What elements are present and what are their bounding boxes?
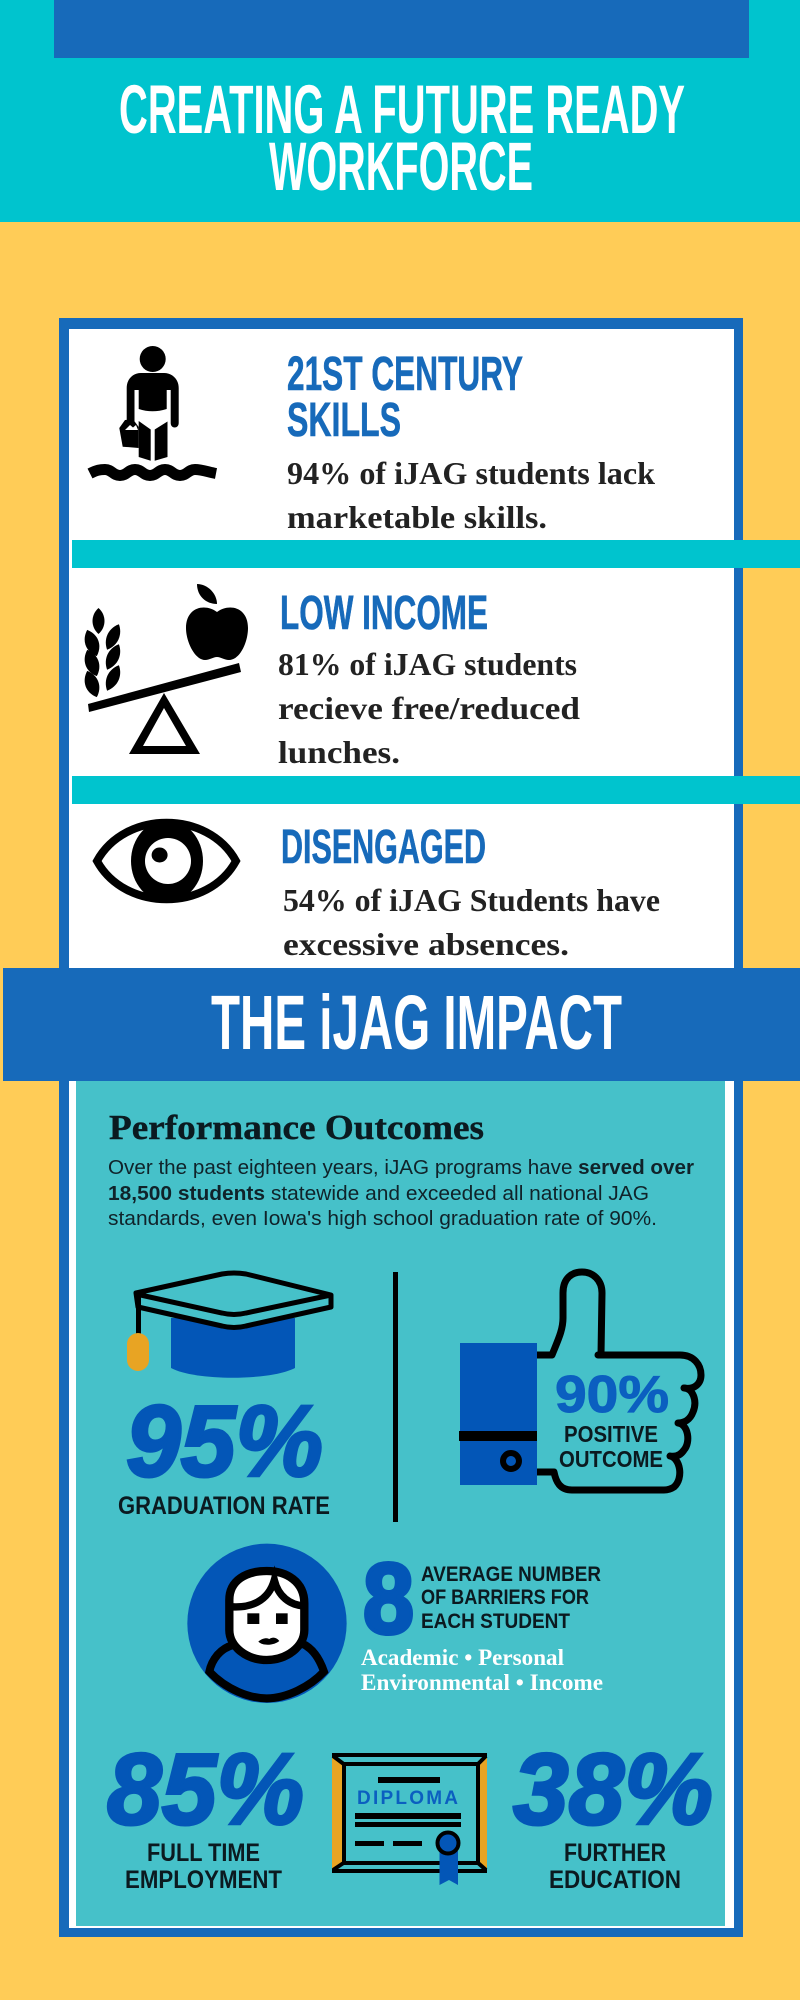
text: skills statistic xyxy=(287,455,655,535)
text: income statistic xyxy=(278,646,580,770)
text: absence statistic: excessive absences. xyxy=(283,926,569,962)
stat: 8 average barriers: Academic • Personal xyxy=(361,1645,564,1670)
text: intro paragraph: standards, even Iowa's high school graduation rate of 90%. xyxy=(108,1208,657,1230)
text: intro paragraph: Over the past eighteen years, iJAG programs have served over xyxy=(108,1157,694,1179)
stat: 38% further education: 38% xyxy=(513,1734,713,1846)
heading: performance outcomes: Performance Outcomes xyxy=(109,1108,484,1147)
vertical divider xyxy=(393,1272,398,1522)
divider bar: cyan 1 xyxy=(72,540,800,568)
stat: 8 average barriers: AVERAGE NUMBER xyxy=(421,1563,601,1586)
stat: 95% graduation rate: 95% xyxy=(126,1386,323,1498)
header panel xyxy=(0,0,800,222)
stat: 85% full time employment: EMPLOYMENT xyxy=(125,1866,282,1894)
stat: 95% graduation rate: GRADUATION RATE xyxy=(118,1492,330,1520)
stat: 8 average barriers: 8 xyxy=(363,1543,414,1655)
heading: 21st century skills: SKILLS xyxy=(287,394,401,447)
icon: thumbs up with 90% positive outcome xyxy=(459,1272,701,1490)
stat: 8 average barriers: EACH STUDENT xyxy=(421,1610,570,1633)
text: absence statistic xyxy=(283,882,660,962)
text: income statistic: lunches. xyxy=(278,734,400,770)
text: income statistic: recieve free/reduced xyxy=(278,690,580,726)
icon: diploma: DIPLOMA xyxy=(357,1788,458,1809)
stat: 8 average barriers: Environmental • Income xyxy=(361,1670,603,1695)
text: income statistic: 81% of iJAG students xyxy=(278,646,577,682)
icon: student portrait xyxy=(187,1544,347,1703)
text: skills statistic: marketable skills. xyxy=(287,499,547,535)
panel: challenges xyxy=(59,318,800,979)
icon: person in water with bucket xyxy=(90,346,216,476)
icon: eye xyxy=(97,820,236,902)
stat: 38% further education: EDUCATION xyxy=(549,1866,681,1894)
stat: 85% full time employment xyxy=(107,1734,304,1894)
stat: 85% full time employment: FULL TIME xyxy=(147,1839,260,1867)
text: skills statistic: 94% of iJAG students lack xyxy=(287,455,655,491)
icon: wheat and apple on scale xyxy=(81,584,248,754)
panel: performance outcomes xyxy=(59,1070,743,1937)
heading: low income: LOW INCOME xyxy=(280,587,488,640)
text: intro paragraph xyxy=(108,1157,694,1230)
icon: graduation cap xyxy=(127,1273,331,1378)
stat: 85% full time employment: 85% xyxy=(107,1734,304,1846)
heading: disengaged: DISENGAGED xyxy=(281,821,486,874)
title xyxy=(119,71,685,205)
stat: 8 average barriers: OF BARRIERS FOR xyxy=(421,1586,589,1609)
icon: thumbs up with 90% positive outcome: 90% xyxy=(555,1366,669,1424)
icon: diploma xyxy=(332,1755,487,1885)
heading: 21st century skills xyxy=(287,348,523,447)
banner: the iJAG impact xyxy=(3,968,800,1081)
divider bar: cyan 2 xyxy=(72,776,800,804)
title: WORKFORCE xyxy=(269,128,533,205)
stat: 8 average barriers xyxy=(361,1543,603,1695)
heading: 21st century skills: 21ST CENTURY xyxy=(287,348,523,401)
text: intro paragraph: 18,500 students statewide and exceeded all national JAG xyxy=(108,1183,649,1205)
text: absence statistic: 54% of iJAG Students have xyxy=(283,882,660,918)
icon: thumbs up with 90% positive outcome: POSITIVE xyxy=(564,1421,658,1447)
stat: 38% further education xyxy=(513,1734,713,1894)
icon: thumbs up with 90% positive outcome: OUTCOME xyxy=(559,1446,663,1472)
stat: 38% further education: FURTHER xyxy=(564,1839,666,1867)
